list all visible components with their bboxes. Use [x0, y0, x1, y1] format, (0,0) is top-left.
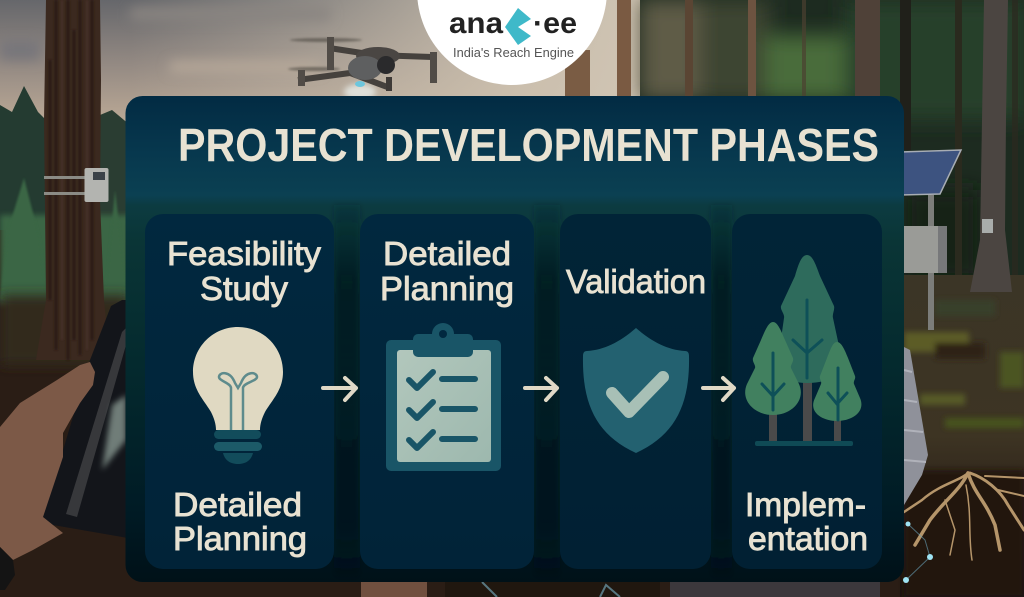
skin and shirt visible under panel	[361, 582, 880, 597]
heading: feasibility study: Study	[200, 270, 289, 307]
logo badge	[417, 0, 607, 85]
label: implementation	[745, 486, 868, 557]
label: implementation: entation	[748, 520, 868, 557]
solar panel	[900, 150, 961, 330]
logo wordmark left: ana	[449, 7, 503, 40]
ground, right	[900, 275, 1024, 597]
sensor on trunk	[44, 168, 108, 202]
panel: project development phases	[126, 96, 904, 582]
large trunk, left	[36, 0, 110, 360]
striped cloth, right	[900, 345, 928, 505]
card: implementation	[732, 214, 882, 569]
heading: feasibility study	[167, 235, 322, 307]
tablet	[43, 300, 128, 538]
tree trunks behind panel	[565, 0, 880, 96]
arrow 2	[525, 378, 557, 400]
icon: light bulb	[193, 327, 283, 464]
logo tagline: India's Reach Engine	[453, 45, 574, 60]
sensor box on right trunk	[982, 219, 993, 233]
card: feasibility study	[145, 214, 334, 569]
glowing network nodes	[903, 522, 933, 583]
card: detailed planning	[360, 214, 534, 569]
distant treeline, left	[0, 86, 130, 365]
heading: detailed planning: Planning	[380, 270, 514, 307]
heading: validation: Validation	[566, 263, 706, 300]
icon: shield with check	[583, 328, 689, 453]
logo diamond icon	[505, 8, 531, 45]
heading: detailed planning: Detailed	[383, 235, 511, 272]
arrow 1	[323, 378, 356, 400]
logo wordmark right: ·ee	[533, 7, 577, 40]
icon: clipboard checklist	[386, 323, 501, 471]
heading: feasibility study: Feasibility	[167, 235, 322, 272]
icon: three trees	[745, 255, 861, 446]
label: detailed planning: Planning	[173, 520, 307, 557]
drone	[288, 37, 437, 100]
arrow 3	[703, 378, 734, 400]
dark gaps between cards	[334, 205, 732, 582]
label: detailed planning	[173, 486, 307, 557]
label: implementation: Implem-	[745, 486, 866, 523]
card: validation	[560, 214, 711, 569]
forest, upper right	[640, 0, 1024, 300]
large trunk, right	[970, 0, 1012, 292]
heading: detailed planning	[380, 235, 514, 307]
roots and glowing network	[904, 473, 1024, 560]
title: PROJECT DEVELOPMENT PHASES	[178, 119, 879, 171]
label: detailed planning: Detailed	[173, 486, 302, 523]
hand	[0, 362, 95, 590]
